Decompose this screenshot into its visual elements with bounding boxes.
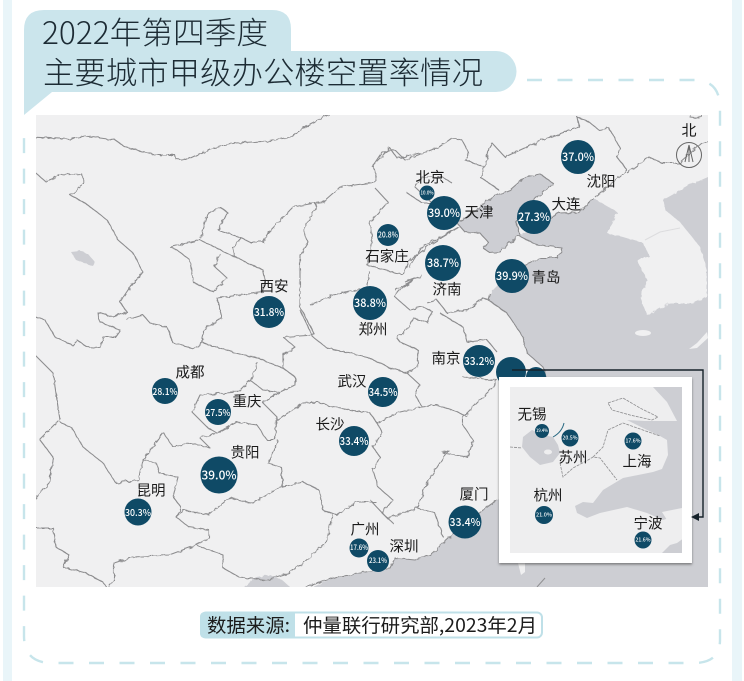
inset city: 上海 bbox=[622, 432, 652, 472]
city: 西安: 31.8% bbox=[254, 304, 284, 320]
inset city: 上海: 17.6% bbox=[626, 438, 641, 444]
source label background bbox=[200, 612, 295, 638]
city: 青岛 bbox=[495, 259, 560, 293]
inset dashed borders bbox=[510, 423, 660, 480]
city: 大连: 大连 bbox=[552, 194, 581, 214]
city: 成都: 成都 bbox=[176, 362, 204, 382]
city: 沈阳: 沈阳 bbox=[586, 170, 616, 192]
city: 北京: 10.0% bbox=[420, 190, 434, 196]
title line 1: 2022年第四季度 bbox=[42, 8, 268, 53]
inset city: 无锡: 无锡 bbox=[518, 404, 546, 424]
city: 厦门: 33.4% bbox=[450, 514, 480, 530]
city: 石家庄: 石家庄 bbox=[365, 246, 409, 266]
bubble: hidden Shanghai behind inset bbox=[496, 357, 526, 387]
city: 济南: 38.7% bbox=[427, 255, 459, 271]
inset city: 苏州: 苏州 bbox=[558, 446, 588, 468]
city: 昆明: 30.3% bbox=[125, 505, 151, 519]
map panel bbox=[30, 113, 715, 595]
Korea border line bbox=[645, 228, 680, 240]
source note bbox=[200, 611, 542, 638]
city: 厦门: 厦门 bbox=[460, 484, 488, 504]
inset city: 无锡: 19.4% bbox=[536, 428, 549, 434]
inset Chongming island bbox=[608, 398, 658, 420]
city: 成都 bbox=[152, 362, 204, 404]
city: 深圳: 23.1% bbox=[369, 556, 387, 566]
north label: 北 bbox=[681, 120, 697, 140]
inset city: 杭州: 杭州 bbox=[534, 484, 562, 506]
city: 武汉: 34.5% bbox=[368, 384, 398, 400]
left decorative stripe bbox=[3, 0, 12, 681]
inset city: 上海: 上海 bbox=[622, 450, 652, 472]
city: 天津: 39.0% bbox=[428, 205, 460, 221]
city: 广州 bbox=[350, 518, 380, 558]
city: 青岛: 39.9% bbox=[496, 268, 528, 284]
inset city: 宁波 bbox=[634, 512, 663, 548]
map land bbox=[36, 115, 708, 587]
city: 深圳 bbox=[367, 536, 418, 572]
city: 大连 bbox=[517, 194, 581, 234]
inset southeast sea bbox=[662, 540, 682, 553]
right decorative stripe bbox=[732, 0, 742, 681]
city: 济南: 济南 bbox=[432, 278, 462, 300]
city: 北京: 北京 bbox=[416, 166, 444, 188]
city: 天津 bbox=[427, 196, 494, 230]
inset panel: Yangtze delta bbox=[499, 377, 692, 563]
city: 济南 bbox=[425, 245, 462, 300]
city: 重庆: 重庆 bbox=[232, 390, 262, 412]
inset lake island bbox=[544, 450, 552, 454]
city: 西安 bbox=[253, 276, 288, 328]
city: 贵阳 bbox=[200, 442, 260, 494]
inset city: 苏州: 20.5% bbox=[562, 434, 578, 442]
inset city: 无锡 bbox=[518, 404, 549, 438]
title line 2: 主要城市甲级办公楼空置率情况 bbox=[43, 48, 483, 93]
inset city: 宁波: 21.6% bbox=[636, 536, 651, 544]
city: 南京 bbox=[432, 345, 495, 377]
city: 西安: 西安 bbox=[260, 276, 288, 296]
city: 长沙: 33.4% bbox=[340, 433, 368, 449]
city: 大连: 27.3% bbox=[518, 209, 550, 225]
city: 广州: 广州 bbox=[350, 518, 380, 540]
city: 郑州: 郑州 bbox=[358, 318, 388, 340]
city: 重庆 bbox=[205, 390, 262, 425]
sea bbox=[71, 172, 715, 595]
city: 贵阳: 贵阳 bbox=[230, 442, 260, 462]
city: 沈阳: 37.0% bbox=[562, 149, 594, 165]
city: 武汉 bbox=[338, 370, 398, 407]
arrow to inset bbox=[512, 370, 703, 521]
city: 厦门 bbox=[448, 484, 488, 538]
inset city: 杭州 bbox=[534, 484, 562, 524]
city: 天津: 天津 bbox=[464, 202, 494, 222]
province and country borders bbox=[30, 113, 712, 590]
city: 长沙: 长沙 bbox=[316, 414, 344, 434]
city: 北京 bbox=[416, 166, 444, 200]
inset city: 苏州 bbox=[558, 430, 588, 468]
inset Zhoushan islands bbox=[662, 508, 682, 519]
bubble: hidden Suzhou behind inset bbox=[526, 367, 546, 387]
city: 郑州 bbox=[353, 286, 388, 340]
inset land bbox=[510, 387, 682, 553]
source box bbox=[201, 612, 542, 638]
inset frame bbox=[499, 377, 692, 563]
islands bbox=[518, 330, 708, 575]
city: 武汉: 武汉 bbox=[338, 370, 367, 392]
source text: 仲量联行研究部,2023年2月 bbox=[303, 611, 537, 638]
city: 石家庄 bbox=[365, 224, 409, 266]
city: 重庆: 27.5% bbox=[206, 405, 231, 419]
inset teal arc bbox=[553, 423, 564, 437]
city: 贵阳: 39.0% bbox=[202, 466, 236, 484]
compass icon bbox=[676, 142, 702, 168]
inset map bbox=[510, 387, 684, 555]
inset Lake Tai bbox=[522, 430, 560, 465]
city: 郑州: 38.8% bbox=[354, 295, 386, 311]
source label: 数据来源: bbox=[207, 611, 290, 638]
city: 南京: 南京 bbox=[432, 348, 460, 368]
city: 石家庄: 20.8% bbox=[378, 230, 398, 240]
Philippines coast line bbox=[537, 578, 545, 587]
inset city: 宁波: 宁波 bbox=[634, 512, 663, 534]
city: 南京: 33.2% bbox=[464, 353, 494, 369]
city: 长沙 bbox=[316, 414, 369, 456]
city: 昆明 bbox=[124, 480, 166, 526]
city: 深圳: 深圳 bbox=[390, 536, 418, 556]
city: 沈阳 bbox=[561, 140, 616, 192]
city: 昆明: 昆明 bbox=[136, 480, 166, 500]
inset sea and Hangzhou Bay bbox=[575, 387, 684, 520]
title banner bbox=[24, 8, 516, 115]
city: 广州: 17.6% bbox=[350, 543, 368, 553]
compass north marker bbox=[676, 120, 702, 168]
city: 成都: 28.1% bbox=[152, 384, 178, 398]
city: 青岛: 青岛 bbox=[532, 266, 560, 288]
inset city: 杭州: 21.0% bbox=[536, 512, 552, 518]
